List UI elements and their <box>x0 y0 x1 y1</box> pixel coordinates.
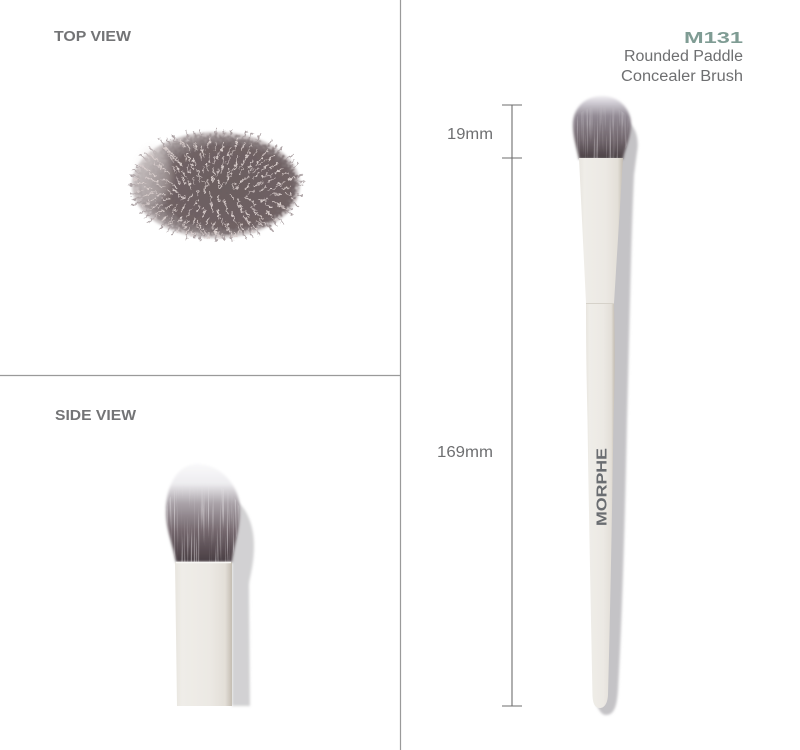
light bristle tips <box>134 136 297 239</box>
product title: Concealer Brush <box>621 68 743 85</box>
brush ferrule <box>579 158 623 303</box>
soft halo around the tip <box>132 132 300 238</box>
brand name on handle: MORPHE <box>594 448 610 526</box>
brush handle <box>586 303 615 708</box>
side view shadow <box>232 498 254 706</box>
dimension ruler <box>502 105 522 706</box>
product title <box>621 30 743 85</box>
product title: Rounded Paddle <box>624 48 743 65</box>
heading: side view: SIDE VIEW <box>55 408 136 424</box>
panel dividers <box>0 0 400 750</box>
label: bristle length: 19mm <box>447 126 493 143</box>
panel: top view brush tip <box>127 130 304 246</box>
heading: top view: TOP VIEW <box>54 29 131 45</box>
full brush <box>573 96 638 715</box>
side view bristles <box>166 464 240 562</box>
panel: side view brush close-up <box>166 464 254 706</box>
product title: M131 <box>684 30 743 47</box>
fuzzy outer fringe <box>130 130 304 241</box>
light fringe on the left <box>137 147 171 203</box>
brush bristles <box>573 96 631 159</box>
label: handle length: 169mm <box>437 444 493 461</box>
side view handle <box>175 562 232 706</box>
brush shadow <box>596 120 638 715</box>
